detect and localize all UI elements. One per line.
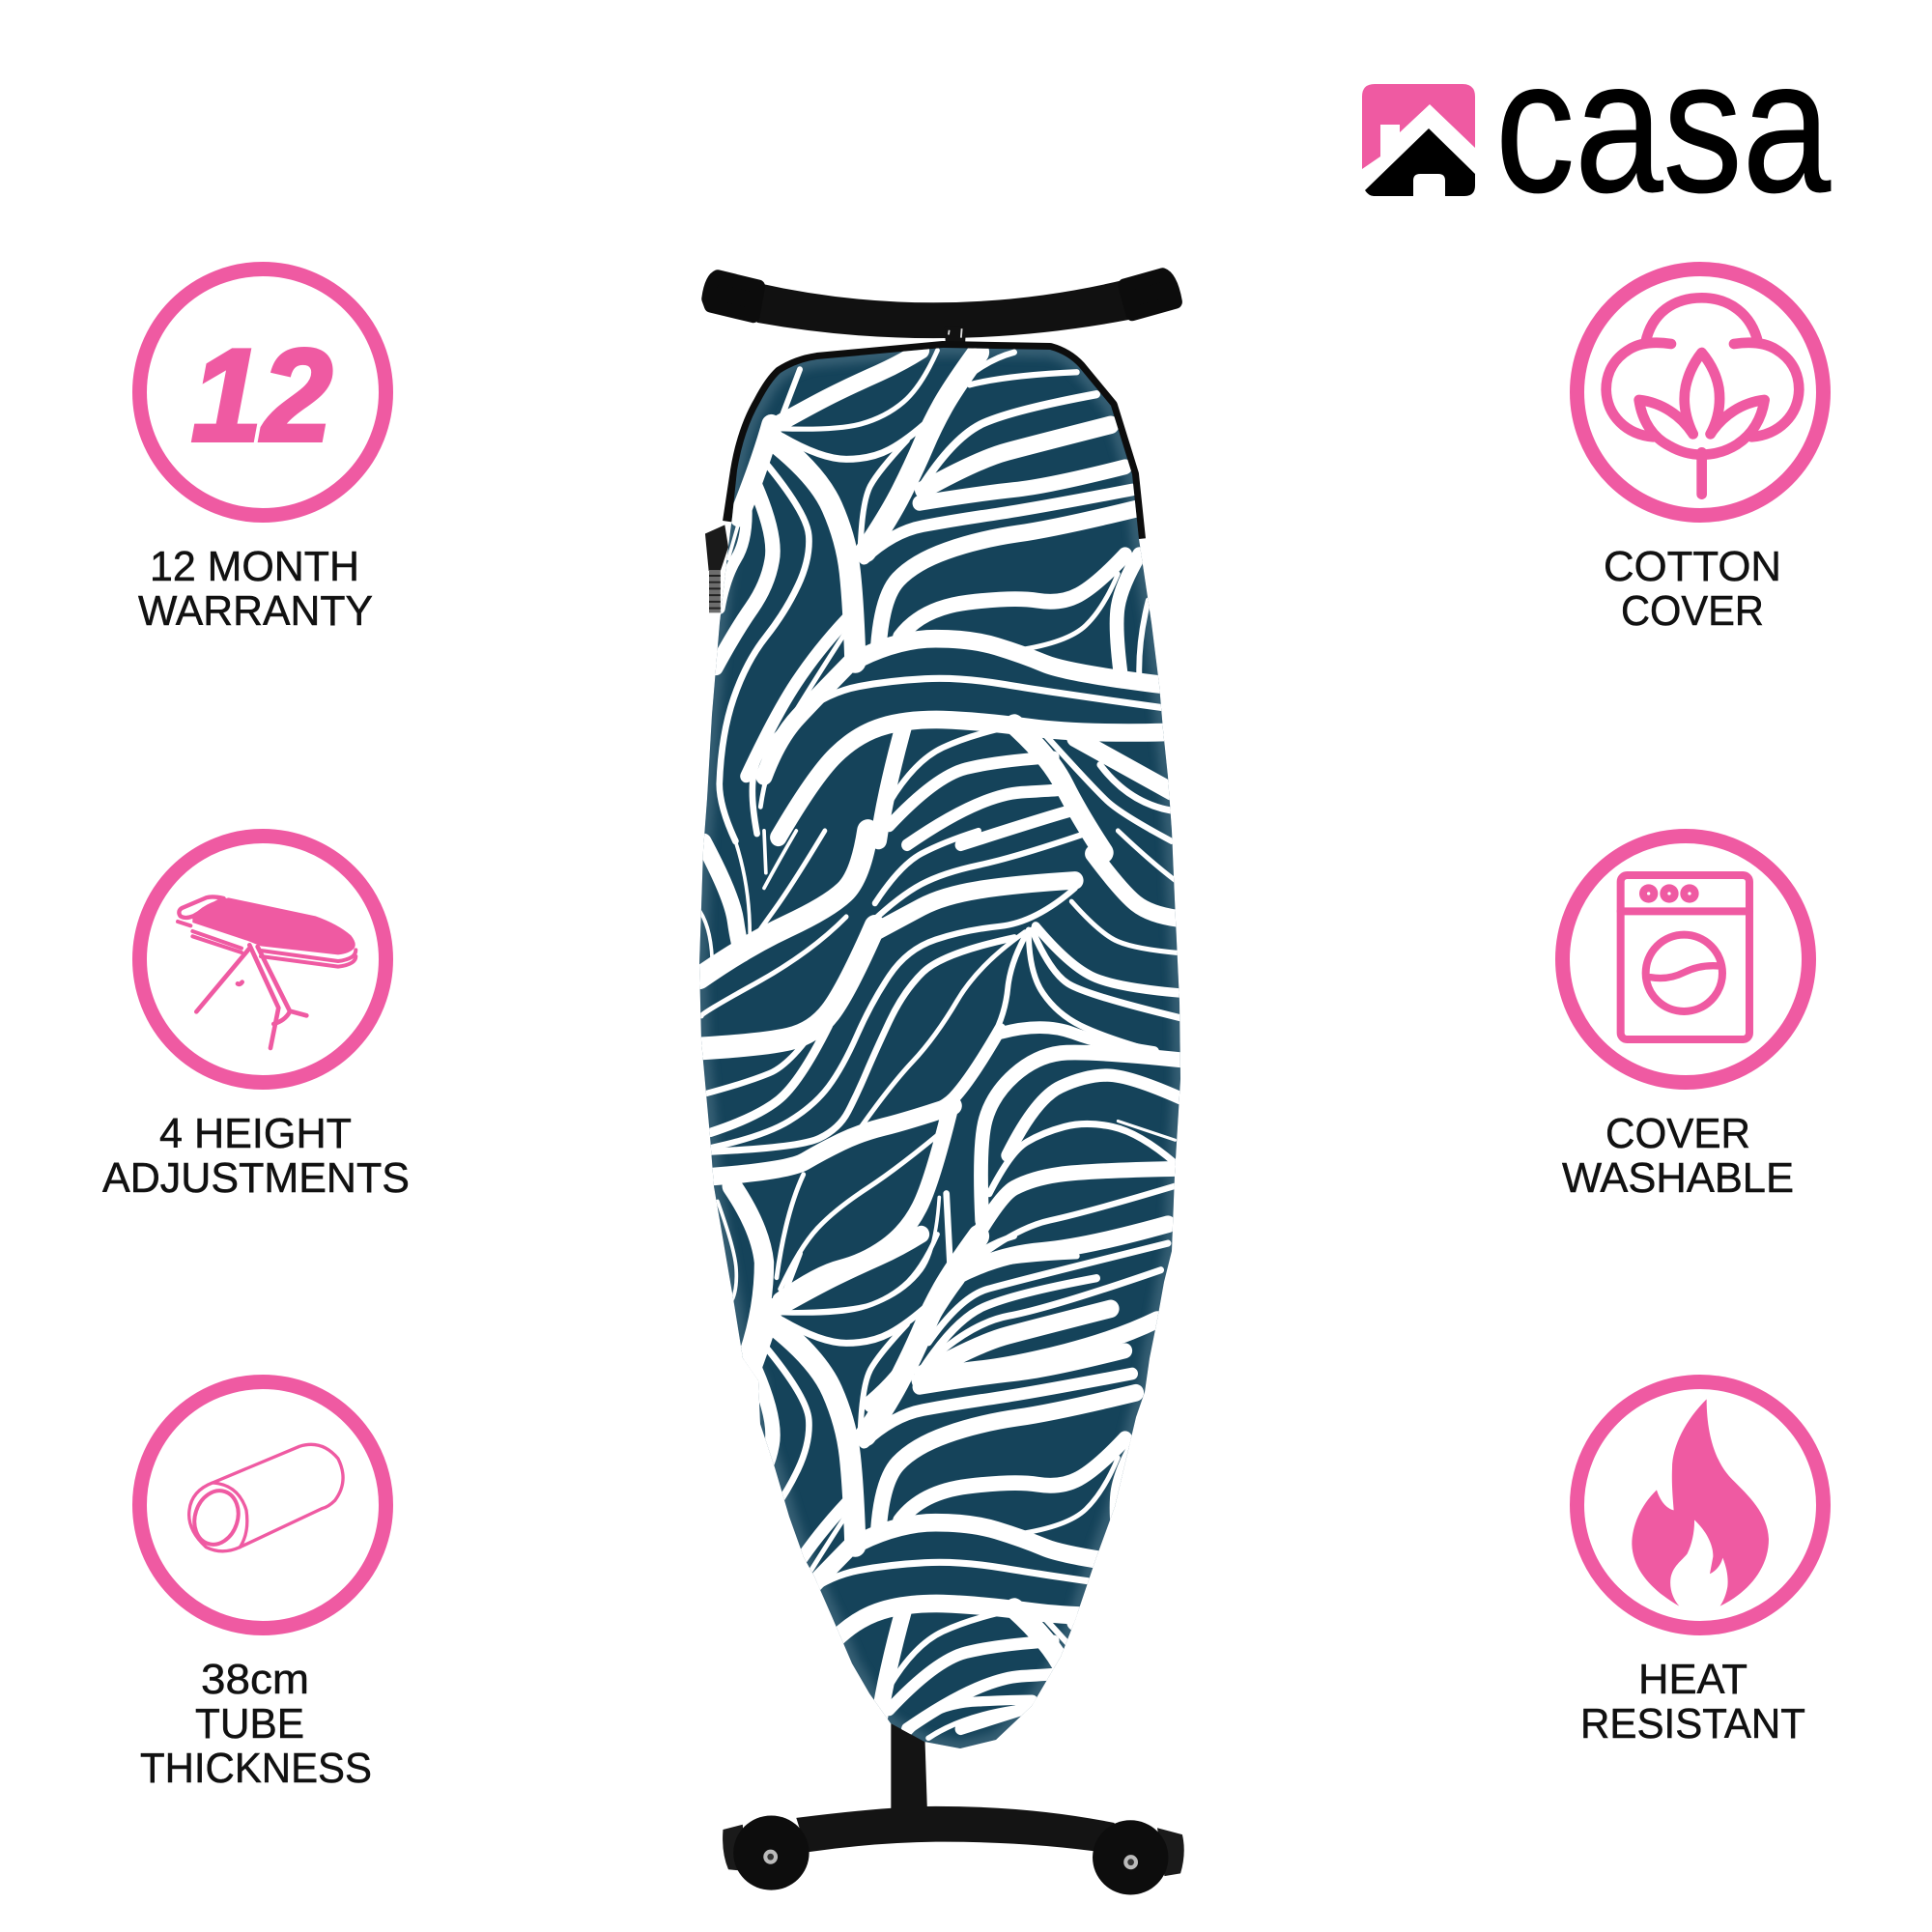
icon: cotton flower xyxy=(1606,298,1799,495)
feature: heat resistant xyxy=(1577,1381,1824,1747)
ironing board product image xyxy=(676,274,1198,1894)
logo wordmark: casa xyxy=(1495,20,1831,232)
valve on board edge xyxy=(705,525,728,612)
label: WASHABLE xyxy=(1562,1154,1794,1202)
icon: house logo mark xyxy=(1362,84,1475,196)
circle badge xyxy=(1577,269,1824,516)
left wheel xyxy=(733,1815,810,1890)
label: COTTON xyxy=(1604,543,1781,590)
label: 12 MONTH xyxy=(150,543,359,590)
icon: flame xyxy=(1632,1399,1769,1606)
circle badge xyxy=(139,1381,386,1629)
label: HEAT xyxy=(1638,1656,1747,1703)
label: COVER xyxy=(1621,587,1764,635)
feature: cover washable xyxy=(1562,837,1808,1202)
label: ADJUSTMENTS xyxy=(102,1154,410,1202)
label: COVER xyxy=(1605,1110,1750,1157)
circle badge xyxy=(1577,1381,1824,1629)
feature: 38cm tube thickness xyxy=(139,1381,386,1792)
zip edge of cover xyxy=(729,348,1139,539)
icon: tube xyxy=(187,1444,343,1551)
circle badge xyxy=(139,837,386,1082)
label: THICKNESS xyxy=(140,1745,372,1792)
board cover pattern xyxy=(676,328,1198,1758)
logo: casa xyxy=(1362,20,1831,232)
circle badge xyxy=(1563,837,1808,1082)
feature: 4 height adjustments xyxy=(102,837,410,1202)
label: 4 HEIGHT xyxy=(159,1110,352,1157)
icon: ironing board xyxy=(178,896,355,1048)
icon: washing machine xyxy=(1621,875,1749,1039)
right wheel xyxy=(1093,1820,1168,1894)
circle badge xyxy=(139,269,386,516)
label: WARRANTY xyxy=(138,587,373,635)
wheeled base frame xyxy=(723,1719,1184,1894)
label: 38cm xyxy=(201,1656,309,1703)
feature: cotton cover xyxy=(1577,269,1824,635)
feature: 12 month warranty xyxy=(138,269,386,635)
icon: number 12: 12 xyxy=(191,322,332,469)
label: RESISTANT xyxy=(1580,1700,1805,1747)
handle bar and nose rest xyxy=(708,274,1176,347)
label: TUBE xyxy=(195,1700,304,1747)
